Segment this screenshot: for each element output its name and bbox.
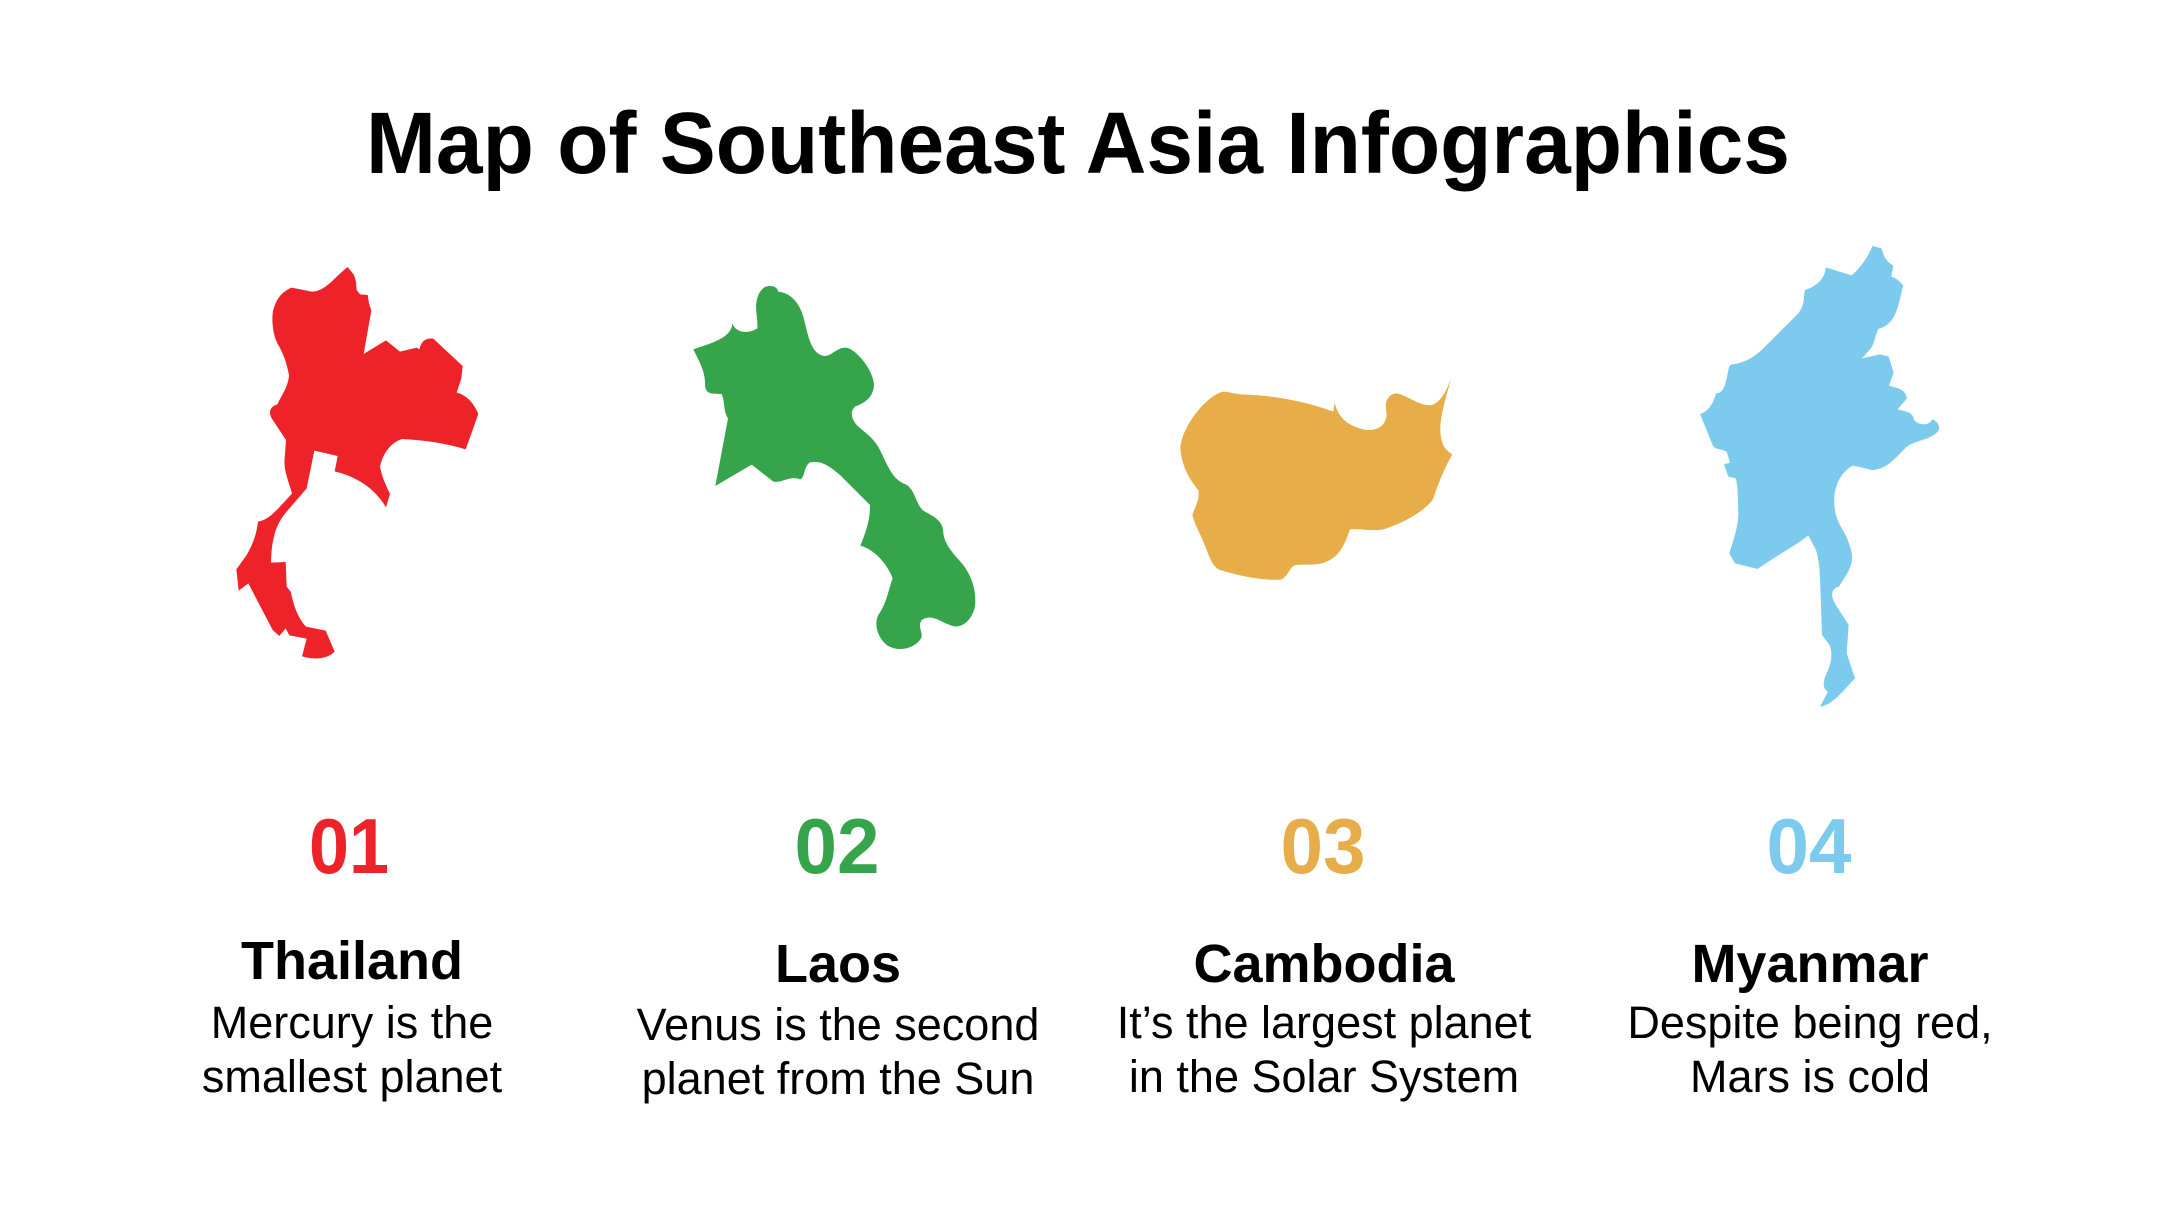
description: Laos: planet from the Sun: [642, 1053, 1034, 1104]
panel: Cambodia: [1117, 378, 1532, 1102]
number 02: 02: [794, 802, 880, 890]
heading: Laos: Laos: [775, 934, 901, 994]
description: Cambodia: It’s the largest planet: [1117, 997, 1532, 1048]
description: Myanmar: Mars is cold: [1690, 1051, 1930, 1102]
panel: Myanmar: [1627, 246, 1993, 1102]
map: Thailand: [236, 267, 478, 658]
description: Laos: Venus is the second: [637, 999, 1039, 1050]
panel: Thailand: [202, 267, 503, 1102]
number 01: 01: [309, 802, 389, 890]
number 03: 03: [1280, 802, 1366, 890]
description: Myanmar: Despite being red,: [1627, 997, 1993, 1048]
title: Map of Southeast Asia Infographics: [366, 95, 1790, 192]
heading: Cambodia: Cambodia: [1193, 934, 1455, 994]
number 04: 04: [1766, 802, 1852, 890]
heading: Thailand: Thailand: [241, 931, 463, 991]
map: Laos: [693, 286, 975, 649]
description: Thailand: Mercury is the: [211, 997, 493, 1048]
description: Thailand: smallest planet: [202, 1051, 503, 1102]
map: Myanmar: [1700, 246, 1939, 707]
heading: Myanmar: Myanmar: [1691, 934, 1929, 994]
description: Cambodia: in the Solar System: [1129, 1051, 1519, 1102]
panel: Laos: [637, 286, 1039, 1104]
map: Cambodia: [1180, 378, 1452, 580]
